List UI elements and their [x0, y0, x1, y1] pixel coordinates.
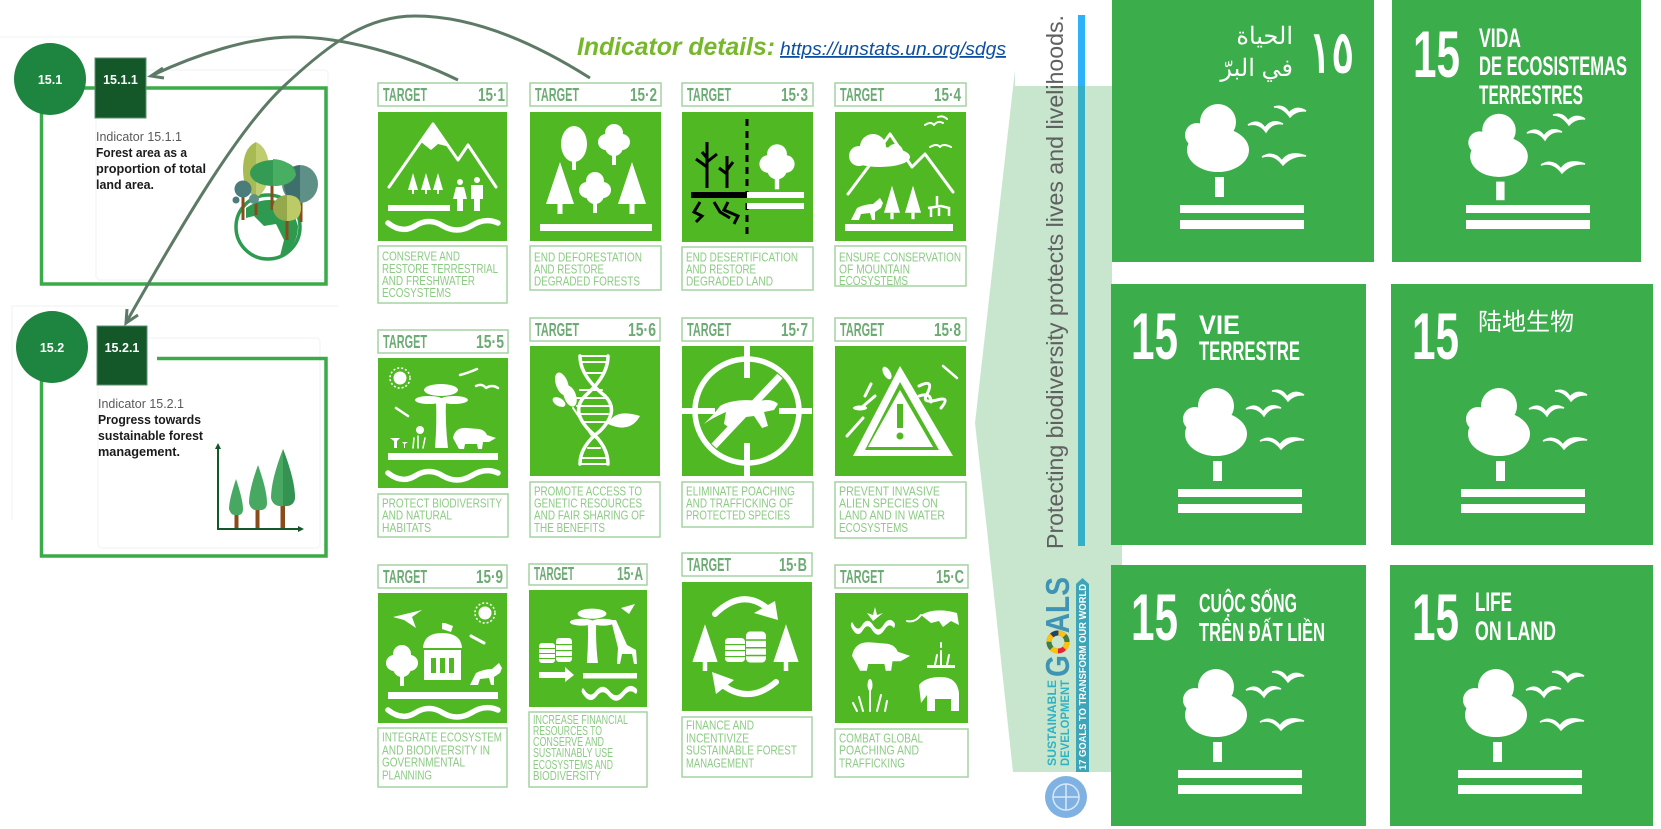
card: target 15-8: ALIEN SPECIES ON: [839, 496, 938, 510]
card: target 15-5: [378, 330, 508, 537]
badge: indicator 15.1.1: 15.1.1: [103, 73, 138, 87]
badge: target 15.2: [16, 311, 88, 383]
card: target 15-6: PROMOTE ACCESS TO: [534, 484, 642, 498]
tile: Spanish: 15: [1413, 17, 1460, 91]
icon: coins, baobab, giraffe: [539, 604, 637, 698]
card: target 15-C: [835, 565, 968, 777]
card: target 15-7: PROTECTED SPECIES: [686, 508, 790, 522]
card: target 15-1: AND FRESHWATER: [382, 274, 475, 288]
card: target 15-1: TARGET: [383, 85, 427, 105]
panel: faint background frames: [0, 37, 338, 548]
card: target 15-B: TARGET: [687, 555, 731, 575]
card: target 15-C: TRAFFICKING: [839, 756, 905, 770]
card: target 15-8: [835, 318, 966, 538]
tile: Vietnamese: CUỘC SỐNG: [1199, 588, 1297, 618]
arrow: target 15-2 to indicator 15.2.1: [126, 16, 590, 323]
tile: Vietnamese: 15: [1131, 580, 1178, 654]
icon: UN emblem: [1045, 776, 1087, 818]
panel: indicator 15.2.1: [16, 311, 326, 556]
card: target 15-B: FINANCE AND: [686, 718, 754, 732]
card: target 15-5: 15·5: [476, 332, 504, 352]
card: target 15-8: LAND AND IN WATER: [839, 508, 945, 522]
link: indicator details: [577, 33, 1006, 61]
icon: poaching crosshair with tiger: [682, 346, 812, 476]
card: target 15-9: 15·9: [476, 567, 503, 587]
icon: mountain, trees, people, water: [388, 124, 498, 230]
tile: French: VIE: [1199, 310, 1240, 340]
text: indicator 15.1.1 description: [96, 130, 206, 192]
card: target 15-8: TARGET: [840, 320, 884, 340]
logo: sustainable development goals: [1039, 577, 1089, 772]
card: target 15-8: ECOSYSTEMS: [839, 521, 908, 535]
card: target 15-6: THE BENEFITS: [534, 521, 605, 535]
card: target 15-1: ECOSYSTEMS: [382, 286, 451, 300]
card: target 15-B: SUSTAINABLE FOREST: [686, 744, 797, 758]
tile: Chinese: 陆地生物: [1478, 309, 1574, 336]
card: target 15-1: RESTORE TERRESTRIAL: [382, 262, 498, 276]
tile: French: TERRESTRE: [1199, 336, 1300, 366]
tile: English: [1390, 565, 1653, 826]
icon: trees on globe: [232, 142, 318, 259]
panel: light green connector: [975, 70, 1122, 772]
card: target 15-2: END DEFORESTATION: [534, 250, 642, 264]
frame: indicator 15.1.1: [42, 88, 326, 284]
badge: indicator 15.2.1: [97, 326, 147, 385]
text: indicator 15.1.1 description: land area.: [96, 178, 154, 192]
card: target 15-C: 15·C: [936, 567, 964, 587]
tile: Arabic: [1112, 0, 1374, 262]
tile: French: [1111, 284, 1366, 545]
logo: sustainable development goals: 17 GOALS TO TRANSFORM OUR WORLD: [1078, 584, 1089, 770]
tile: Arabic: في البرّ: [1219, 55, 1293, 82]
text: indicator 15.2.1 description: [98, 397, 204, 459]
card: target 15-A: ECOSYSTEMS AND: [533, 758, 613, 772]
card: target 15-8: PREVENT INVASIVE: [839, 484, 940, 498]
badge: indicator 15.1.1: [95, 58, 146, 118]
text: indicator 15.2.1 description: management.: [98, 445, 180, 459]
icon: warning triangle, invasive species: [847, 365, 957, 456]
card: target 15-3: DEGRADED LAND: [686, 274, 773, 288]
link: indicator details: https://unstats.un.org/sdgs: [780, 39, 1006, 59]
card: target 15-8: 15·8: [934, 320, 961, 340]
card: target 15-A: BIODIVERSITY: [533, 769, 602, 783]
icon: desertification: [691, 119, 804, 235]
card: target 15-9: TARGET: [383, 567, 427, 587]
logo: sustainable development goals: SUSTAINABLE: [1045, 680, 1059, 766]
tile: Spanish: [1392, 0, 1641, 262]
badge: target 15.1: [14, 43, 86, 115]
card: target 15-A: TARGET: [534, 564, 574, 584]
tile: French: 15: [1131, 299, 1178, 373]
card: target 15-9: INTEGRATE ECOSYSTEM: [382, 730, 502, 744]
text: indicator 15.1.1 description: proportion of total: [96, 162, 206, 176]
tile: English: ON LAND: [1475, 616, 1556, 646]
card: target 15-B: MANAGEMENT: [686, 756, 754, 770]
card: target 15-7: 15·7: [781, 320, 808, 340]
card: target 15-5: HABITATS: [382, 521, 431, 535]
card: target 15-5: AND NATURAL: [382, 508, 452, 522]
tile: Chinese: 15: [1412, 299, 1459, 373]
card: target 15-3: AND RESTORE: [686, 262, 756, 276]
card: target 15-4: TARGET: [840, 85, 884, 105]
icon: government building and nature: [386, 603, 502, 717]
text: indicator 15.1.1 description: Forest area as a: [96, 146, 188, 160]
icon: finance cycle: [692, 599, 799, 694]
card: target 15-7: [682, 318, 813, 527]
tile: Arabic: الحياة: [1236, 23, 1293, 50]
tile: Vietnamese: [1111, 565, 1366, 826]
card: target 15-9: PLANNING: [382, 768, 432, 782]
tile: Chinese: [1391, 284, 1653, 545]
chart: growing trees: [215, 443, 304, 532]
card: target 15-7: AND TRAFFICKING OF: [686, 496, 793, 510]
card: target 15-2: 15·2: [630, 85, 657, 105]
icon: forest: [540, 124, 652, 231]
card: target 15-6: GENETIC RESOURCES: [534, 496, 642, 510]
badge: target 15.1: 15.1: [38, 73, 62, 87]
card: target 15-1: 15·1: [478, 85, 505, 105]
card: target 15-2: TARGET: [535, 85, 579, 105]
tile: Spanish: VIDA: [1479, 23, 1521, 53]
card: target 15-3: END DESERTIFICATION: [686, 250, 798, 264]
card: target 15-2: AND RESTORE: [534, 262, 604, 276]
card: target 15-2: DEGRADED FORESTS: [534, 274, 640, 288]
card: target 15-C: POACHING AND: [839, 744, 919, 758]
frame: indicator 15.2.1: [42, 358, 326, 556]
card: target 15-3: 15·3: [781, 85, 808, 105]
icon: baobab, rhino, water: [388, 368, 498, 480]
link: indicator details: Indicator details:: [577, 33, 775, 61]
card: target 15-4: 15·4: [934, 85, 961, 105]
card: target 15-C: COMBAT GLOBAL: [839, 732, 923, 746]
card: target 15-6: AND FAIR SHARING OF: [534, 508, 645, 522]
card: target 15-4: ENSURE CONSERVATION: [839, 250, 961, 264]
logo: sustainable development goals: GOALS: [1039, 577, 1076, 677]
card: target 15-6: 15·6: [628, 320, 656, 340]
card: target 15-3: [682, 83, 813, 290]
panel: indicator 15.1.1: [14, 43, 326, 284]
tile: English: 15: [1412, 580, 1459, 654]
icon: mountain ecosystem: [845, 116, 953, 231]
card: target 15-A: RESOURCES TO: [533, 724, 602, 738]
card: target 15-A: INCREASE FINANCIAL: [533, 713, 628, 727]
badge: indicator 15.2.1: 15.2.1: [105, 341, 139, 355]
text: indicator 15.2.1 description: Indicator 15.2.1: [98, 397, 184, 411]
card: target 15-1: CONSERVE AND: [382, 250, 460, 264]
text: indicator 15.2.1 description: sustainable forest: [98, 429, 204, 443]
icon: DNA, wheat, leaf: [551, 356, 640, 464]
card: target 15-A: 15·A: [617, 564, 643, 584]
card: target 15-9: AND BIODIVERSITY IN: [382, 744, 490, 758]
card: target 15-7: TARGET: [687, 320, 731, 340]
logo: sustainable development goals: DEVELOPMENT: [1058, 679, 1072, 766]
card: target 15-5: TARGET: [383, 332, 427, 352]
text: vertical slogan: Protecting biodiversity protects lives and livelihoods.: [1042, 15, 1068, 549]
text: indicator 15.1.1 description: Indicator 15.1.1: [96, 130, 182, 144]
card: target 15-B: [682, 553, 812, 777]
tile: English: LIFE: [1475, 587, 1512, 617]
card: target 15-B: 15·B: [779, 555, 807, 575]
icon: poached wildlife: [852, 607, 959, 711]
card: target 15-B: INCENTIVIZE: [686, 732, 749, 746]
card: target 15-5: PROTECT BIODIVERSITY: [382, 496, 503, 510]
card: target 15-A: CONSERVE AND: [533, 735, 604, 749]
card: target 15-A: SUSTAINABLY USE: [533, 746, 613, 760]
tile: Spanish: TERRESTRES: [1479, 80, 1583, 110]
card: target 15-6: [530, 318, 660, 537]
arrow: target 15-1 to indicator 15.1.1: [151, 37, 458, 80]
tile: Arabic: ١٥: [1309, 20, 1354, 85]
card: target 15-4: OF MOUNTAIN: [839, 262, 910, 276]
card: target 15-1: [378, 83, 507, 303]
card: target 15-3: TARGET: [687, 85, 731, 105]
card: target 15-6: TARGET: [535, 320, 579, 340]
badge: target 15.2: 15.2: [40, 341, 64, 355]
card: target 15-4: [835, 83, 966, 288]
text: indicator 15.2.1 description: Progress towards: [98, 413, 201, 427]
card: target 15-9: GOVERNMENTAL: [382, 756, 465, 770]
card: target 15-4: ECOSYSTEMS: [839, 274, 908, 288]
card: target 15-9: [378, 565, 507, 787]
bar: blue accent: [1078, 15, 1085, 546]
card: target 15-7: ELIMINATE POACHING: [686, 484, 795, 498]
card: target 15-2: [530, 83, 661, 290]
card: target 15-C: TARGET: [840, 567, 884, 587]
tile: Vietnamese: TRÊN ĐẤT LIỀN: [1199, 617, 1325, 647]
card: target 15-A: [529, 564, 647, 787]
